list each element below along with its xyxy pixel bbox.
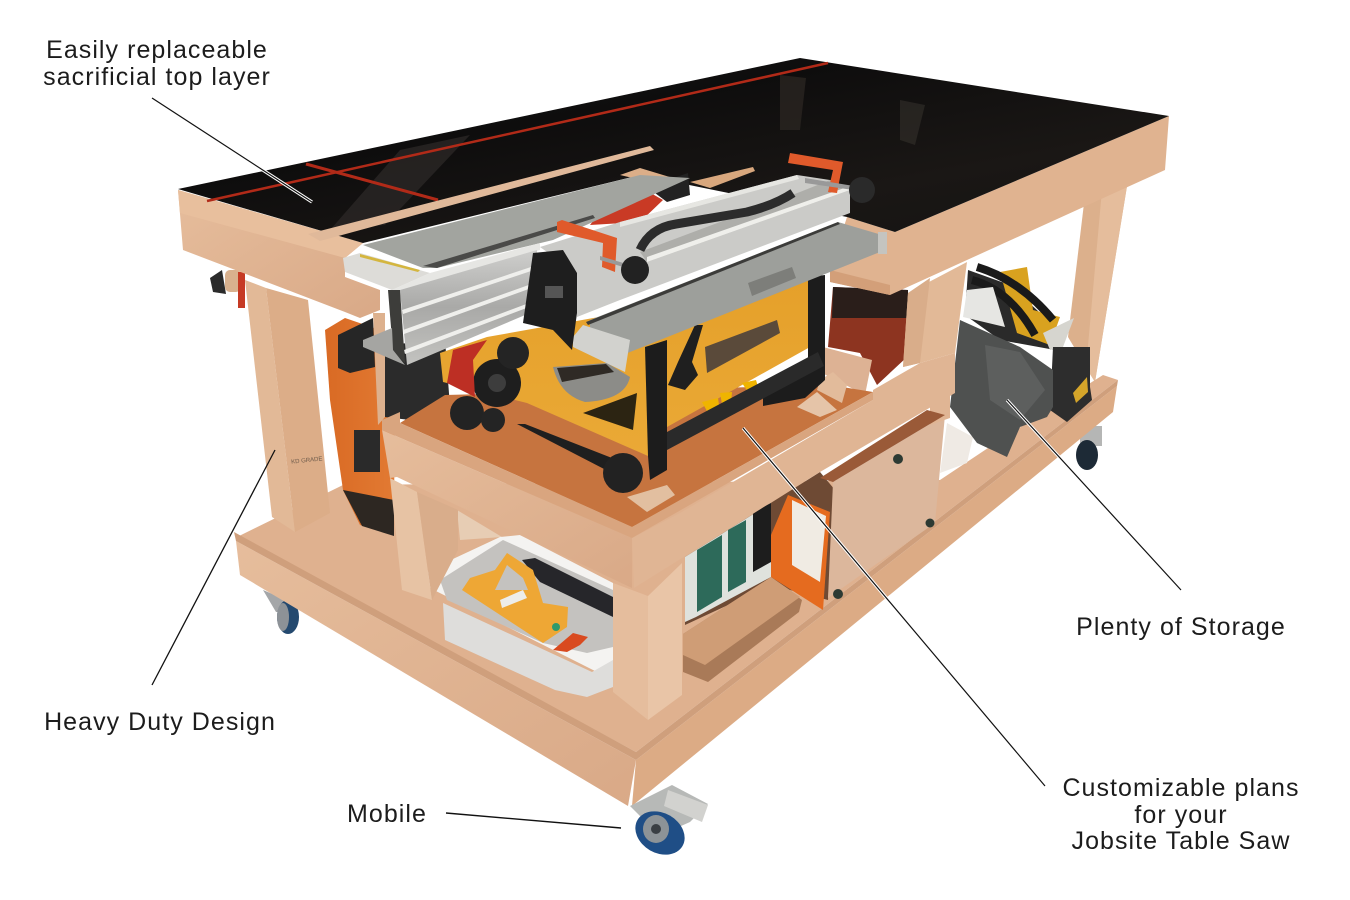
- rim: [418, 535, 613, 672]
- callout: sacrificial top layer: [43, 36, 312, 202]
- fence body: [540, 175, 850, 317]
- bin front wall: [443, 603, 613, 697]
- fence knobs: [621, 177, 875, 284]
- orange booklet: [771, 495, 830, 610]
- grey bag: [950, 320, 1053, 457]
- instruction papers: [1043, 318, 1074, 350]
- left table extension: [363, 175, 690, 268]
- left leg: KD GRADE: [291, 456, 323, 466]
- dark door edge: [820, 410, 945, 482]
- base left face: [236, 541, 636, 806]
- tool box: [1050, 347, 1092, 422]
- callout: mobile: [347, 800, 621, 828]
- shelf MDF edge: [382, 392, 873, 538]
- wood leg behind the saw: [373, 313, 385, 425]
- black handle: [668, 325, 703, 390]
- red handle: [553, 633, 588, 652]
- jobsite table saw body: [440, 275, 825, 493]
- label: sacrificial top layer: [43, 63, 271, 91]
- back left caster: [263, 590, 299, 634]
- callout: customizable plans: Customizable plans: [1062, 774, 1300, 802]
- left leg: [245, 280, 330, 532]
- wood offcuts: [817, 372, 847, 403]
- sacrificial black surface: [178, 58, 1169, 243]
- yellow tool case: [1000, 267, 1060, 345]
- back right caster: [1076, 426, 1102, 470]
- rail top run: [392, 243, 540, 290]
- dark bag behind saw: [385, 340, 450, 420]
- yellow push block: [462, 553, 568, 643]
- dark tool in bin: [522, 558, 613, 617]
- callout: customizable plans: for your: [1134, 801, 1228, 829]
- wooden foot block: [627, 485, 675, 512]
- base platform: [234, 375, 1118, 806]
- fence cable chain: [640, 193, 793, 250]
- cardboard sheet: [822, 347, 872, 395]
- rubber foot: [603, 453, 643, 493]
- reflections: [330, 135, 470, 230]
- right apron: [830, 116, 1169, 295]
- callout: customizable plans: [743, 428, 1300, 855]
- left apron: [178, 190, 380, 318]
- base right face: [632, 386, 1117, 806]
- cables: [972, 267, 1053, 335]
- rail face: [400, 250, 537, 365]
- orange fence clamps: [557, 153, 860, 272]
- leg clamp handle: [210, 270, 245, 308]
- callout: customizable plans: Jobsite Table Saw: [1072, 827, 1290, 855]
- rail end top: [343, 253, 430, 290]
- white storage bin: [418, 535, 613, 697]
- right table extension: [586, 222, 887, 356]
- saw blade: [590, 173, 690, 225]
- slide plate: [705, 320, 780, 373]
- red lock handle: [447, 340, 487, 397]
- back right leg: [1068, 180, 1128, 382]
- red cross-cut slots: [207, 63, 828, 201]
- white jug: [963, 287, 1005, 327]
- rip fence: [540, 175, 850, 317]
- white rags: [940, 423, 973, 473]
- left apron: [382, 430, 632, 588]
- black frame tubes: [645, 340, 667, 480]
- storage cavity shadow: [685, 472, 835, 625]
- leader line: [152, 98, 312, 202]
- bin interior: [440, 540, 613, 653]
- base MDF edge: [234, 380, 1118, 760]
- wood runners: [308, 146, 654, 241]
- shelf top: [400, 385, 873, 527]
- workbench illustration: [178, 58, 1169, 863]
- fence channel: [640, 180, 850, 262]
- upper shelf: [382, 353, 955, 588]
- DeWalt label: [583, 393, 637, 430]
- front shelf post: [613, 563, 682, 720]
- rail end plate: [388, 290, 405, 363]
- callout: plenty of storage: Plenty of Storage: [1076, 613, 1286, 641]
- label: Easily replaceable: [46, 36, 268, 64]
- base top surface: [237, 375, 1118, 752]
- middle post and dark storage: [822, 262, 967, 395]
- table top: [178, 58, 1169, 318]
- front caster: [627, 785, 708, 863]
- dark gap behind items: [965, 270, 1055, 350]
- fence top highlights: [647, 186, 850, 262]
- cardboard behind bin: [457, 510, 502, 540]
- fence lock lever: [523, 250, 577, 350]
- rail right end: [573, 325, 630, 372]
- block under apron: [930, 392, 950, 425]
- aluminium rails: [343, 243, 630, 372]
- miter scale: [553, 363, 630, 402]
- boxed items: [685, 503, 771, 622]
- yellow housing: [440, 277, 823, 456]
- storage items on the right: [940, 267, 1092, 473]
- orange dust extractor: [325, 313, 450, 536]
- right apron: [632, 353, 955, 588]
- stack of round plywood: [683, 577, 802, 682]
- left shelf leg: [390, 478, 458, 600]
- yellow knobs: [702, 398, 720, 413]
- callout: heavy duty design: Heavy Duty Design: [44, 708, 276, 736]
- callout: mobile: Mobile: [347, 800, 427, 828]
- storage panel door: [828, 415, 945, 599]
- callout: plenty of storage: [1007, 400, 1286, 641]
- callout: heavy duty design: [44, 450, 276, 736]
- bevel wheels: [450, 396, 484, 430]
